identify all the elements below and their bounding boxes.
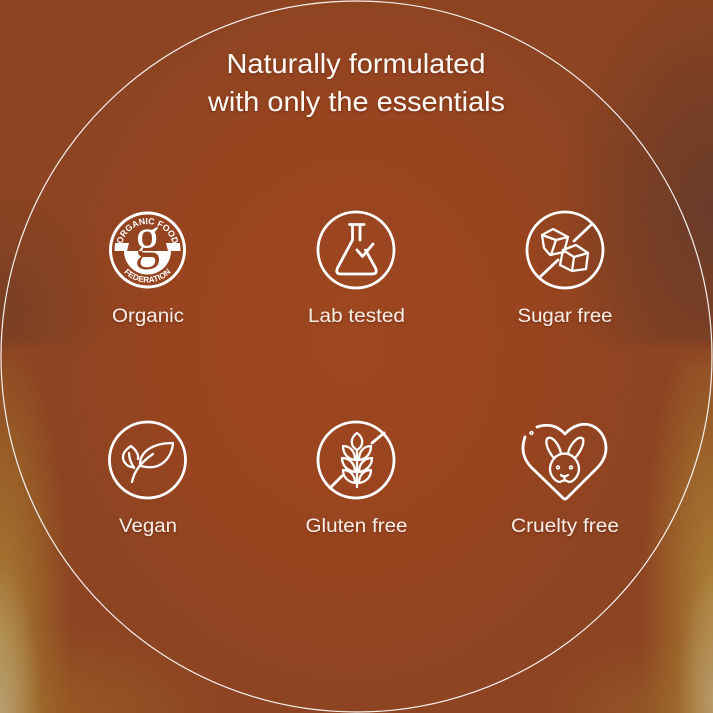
label: lab tested: Lab tested [308, 306, 405, 327]
icon: organic food federation badge: g [135, 205, 160, 270]
label: gluten free: Gluten free [306, 516, 408, 537]
icon: crossed sugar cubes [527, 212, 603, 288]
icon: organic food federation badge: ORGANIC FOOD [117, 218, 178, 243]
icon: crossed wheat [318, 422, 394, 498]
item: gluten free [306, 422, 408, 537]
item: cruelty free [511, 424, 619, 537]
title: Naturally formulated [226, 48, 486, 79]
title: with only the essentials [207, 86, 505, 117]
icon: rabbit in heart [523, 424, 606, 499]
label: vegan: Vegan [119, 516, 177, 537]
item: vegan [110, 422, 186, 537]
title [207, 48, 505, 117]
label: sugar free: Sugar free [518, 306, 612, 327]
icon: organic food federation badge: g [135, 205, 160, 270]
icon: organic food federation badge: FEDERATION [124, 268, 171, 283]
icon: organic food federation badge [109, 212, 186, 288]
icon: flask with check [318, 212, 394, 288]
label: cruelty free: Cruelty free [511, 516, 619, 537]
label: organic: Organic [112, 306, 184, 327]
item: organic [109, 212, 186, 328]
item: lab tested [308, 212, 405, 327]
item: sugar free [518, 212, 612, 327]
icon: leaves [110, 422, 186, 498]
